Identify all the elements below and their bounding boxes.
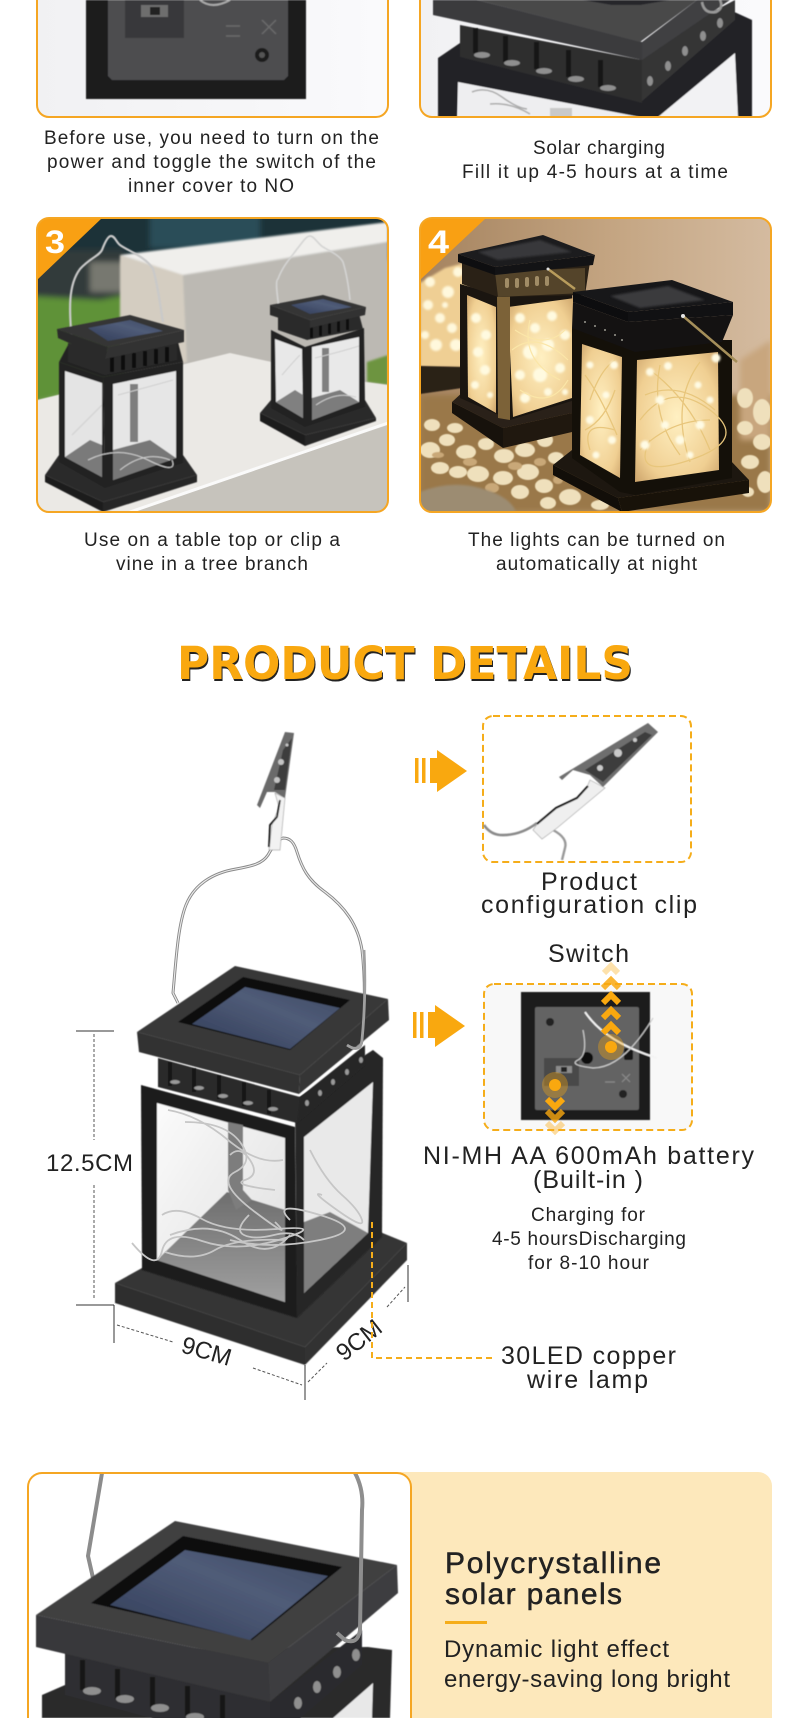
handle rear leg — [88, 1473, 102, 1578]
callout leader: LED wire — [372, 1222, 494, 1358]
lantern underside — [86, 0, 306, 99]
text: charging spec: for 8-10 hour — [528, 1253, 650, 1274]
panel: step 4 night glow photo — [420, 218, 773, 512]
text: feature description: energy-saving long bright — [444, 1666, 730, 1693]
lantern body and collar — [42, 1630, 392, 1718]
text: charging spec — [492, 1205, 686, 1274]
lantern: right — [260, 236, 376, 446]
dimension: depth 9CM: 9CM — [331, 1314, 388, 1367]
figure: main lantern with handle and clip — [115, 732, 407, 1365]
marker: lower switch point with chevrons — [542, 1072, 568, 1131]
arrow: to switch detail — [413, 1005, 465, 1047]
icon: crocodile clip on handle — [257, 732, 294, 850]
text: charging spec: 4-5 hoursDischarging — [492, 1229, 686, 1250]
text: 30LED copper wire lamp: wire lamp — [526, 1366, 648, 1394]
copper wire lights — [132, 1110, 362, 1260]
text: product configuration clip: Product — [541, 868, 637, 896]
lantern: left — [45, 236, 197, 512]
text: step 1 caption: inner cover to NO — [128, 176, 294, 197]
text: step 2 caption: Solar charging — [533, 138, 665, 159]
fairy light wires — [585, 360, 726, 467]
wire handle — [173, 838, 364, 1048]
marker: upper switch point with chevrons — [598, 966, 624, 1060]
text: feature title: Polycrystalline — [445, 1547, 661, 1580]
pebbles ground — [420, 340, 773, 512]
text: step 2 caption — [462, 138, 728, 183]
panel: solar panel feature background — [400, 1472, 772, 1718]
panel: step 2 solar charging photo — [420, 0, 771, 117]
dimension: depth 9CM — [308, 1265, 408, 1382]
text: step 1 caption — [44, 128, 379, 197]
text: battery spec — [423, 1142, 754, 1194]
panel: step 1 power switch photo — [37, 0, 388, 117]
text: step 4 caption: automatically at night — [496, 554, 698, 575]
text: product configuration clip: configuration clip — [481, 891, 697, 919]
text: step 3 caption — [84, 530, 340, 575]
badge: number 4 corner — [420, 218, 486, 280]
badge number: 4: 4 — [428, 224, 449, 260]
text: step 3 caption: vine in a tree branch — [116, 554, 308, 575]
text: switch label: Switch — [548, 940, 629, 968]
text: product configuration clip — [481, 868, 697, 919]
accent underline — [445, 1621, 487, 1624]
text: feature description: Dynamic light effect — [444, 1636, 669, 1663]
table top — [37, 353, 388, 512]
heading: product details: PRODUCT DETAILS — [177, 637, 633, 690]
lantern cap — [137, 966, 389, 1123]
text: step 4 caption — [468, 530, 725, 575]
lantern underside — [521, 992, 657, 1120]
lantern body — [141, 1050, 383, 1318]
icon: clip close-up — [484, 723, 658, 860]
panel: switch and battery detail — [484, 966, 692, 1131]
text: step 1 caption: power and toggle the switch of the — [47, 152, 376, 173]
arrow: to clip detail — [415, 750, 467, 792]
handle front leg — [337, 1473, 362, 1641]
fairy light dots — [586, 354, 720, 458]
text: step 3 caption: Use on a table top or clip a — [84, 530, 340, 551]
lantern: front glowing — [553, 280, 749, 512]
text: step 4 caption: The lights can be turned on — [468, 530, 725, 551]
panel: solar panel photo — [28, 1473, 411, 1718]
text: step 1 caption: Before use, you need to turn on the — [44, 128, 379, 149]
handle front leg — [347, 950, 365, 1048]
panel: clip detail — [483, 716, 691, 862]
badge number: 3: 3 — [45, 224, 65, 260]
dimension: height 12.5CM — [46, 1031, 133, 1305]
lantern: back glowing — [452, 235, 595, 448]
concrete wall — [120, 222, 388, 372]
far background lantern glow — [420, 262, 468, 394]
text: feature description — [444, 1636, 730, 1693]
text: battery spec: (Built-in ) — [533, 1166, 643, 1194]
text: feature title — [445, 1547, 661, 1611]
lantern cap close-up — [433, 0, 752, 117]
text: 30LED copper wire lamp: 30LED copper — [501, 1342, 676, 1370]
dimension: width 9CM — [114, 1305, 305, 1400]
text: feature title: solar panels — [445, 1578, 622, 1611]
text: battery spec: NI-MH AA 600mAh battery — [423, 1142, 754, 1170]
text: step 2 caption: Fill it up 4-5 hours at a time — [462, 162, 728, 183]
badge: number 3 corner — [37, 218, 102, 280]
lantern base — [115, 1232, 407, 1365]
lantern cap — [36, 1521, 398, 1702]
blurred dark background — [38, 219, 387, 400]
dimension: width 9CM: 9CM — [178, 1332, 234, 1372]
text: 30LED copper wire lamp — [501, 1342, 676, 1394]
text: charging spec: Charging for — [531, 1205, 646, 1226]
dimension: height 12.5CM: 12.5CM — [46, 1150, 133, 1177]
panel: step 3 outdoor daylight photo — [30, 210, 395, 512]
table side — [130, 425, 388, 512]
